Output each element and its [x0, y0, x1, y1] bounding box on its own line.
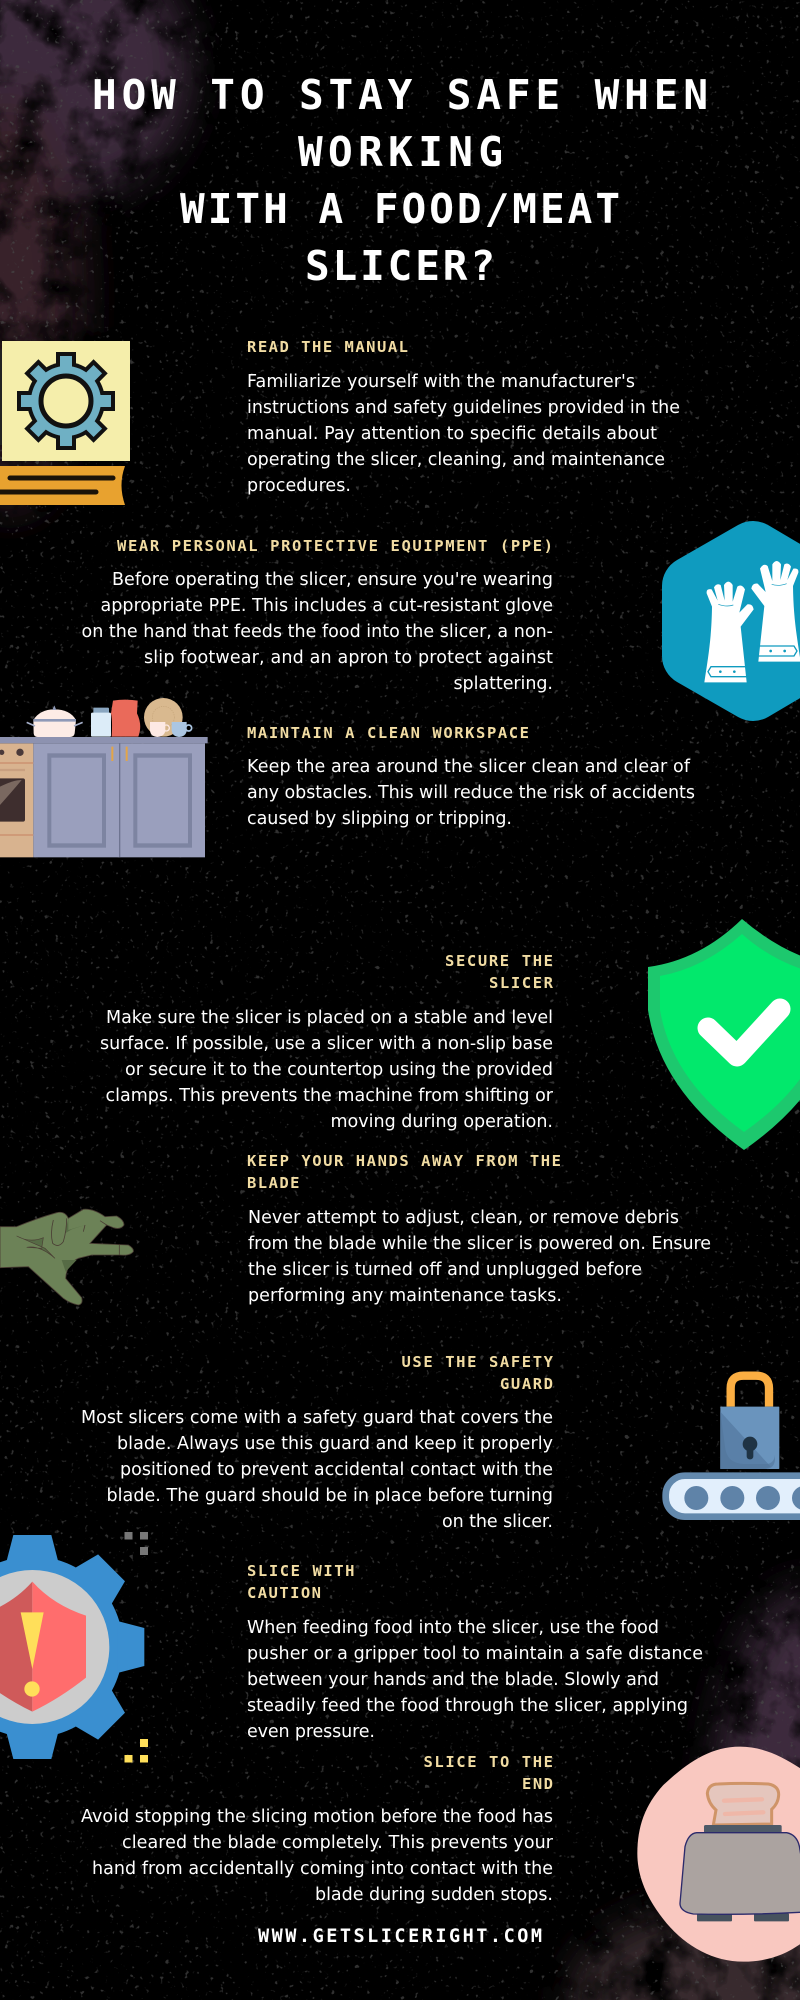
text: clean workspace body	[247, 757, 695, 829]
text: safety guard body: blade. Always use this guard and keep it properly	[117, 1434, 553, 1454]
text: PPE body: Before operating the slicer, ensure you're wearing	[112, 570, 553, 590]
text: secure the slicer body: surface. If possible, use a slicer with a non-slip base	[100, 1034, 553, 1054]
text: slice with caution body: even pressure.	[247, 1722, 375, 1742]
text: slice with caution body	[247, 1618, 703, 1742]
decorative squares: grey	[124, 1532, 148, 1555]
heading: slice with caution	[247, 1562, 354, 1602]
glove left	[704, 582, 754, 682]
heading: slice with caution: SLICE WITH	[247, 1562, 354, 1580]
text: secure the slicer body	[100, 1008, 554, 1132]
icon: gloves in hexagon	[692, 551, 800, 691]
section: keep your hands away	[247, 1152, 711, 1306]
text: slice to the end body: Avoid stopping the slicing motion before the food has	[81, 1807, 553, 1827]
icon: green hand	[0, 1209, 133, 1305]
text: clean workspace body: Keep the area around the slicer clean and clear of	[247, 757, 691, 777]
text: slice with caution body: between your hands and the blade. Slowly and	[247, 1670, 659, 1690]
text: clean workspace body: caused by slipping or tripping.	[247, 809, 512, 829]
heading: secure the slicer	[445, 952, 554, 992]
heading: keep your hands away	[247, 1152, 561, 1192]
text: safety guard body: on the slicer.	[442, 1512, 553, 1532]
title: SLICER?	[305, 242, 495, 290]
heading: keep your hands away: BLADE	[247, 1174, 300, 1192]
heading: secure the slicer: SLICER	[489, 974, 554, 992]
heading: wear PPE: WEAR PERSONAL PROTECTIVE EQUIPMENT (PPE)	[117, 537, 553, 555]
section: slice with caution	[247, 1562, 703, 1742]
text: safety guard body: Most slicers come with a safety guard that covers the	[81, 1408, 553, 1428]
heading: clean workspace: MAINTAIN A CLEAN WORKSPACE	[247, 724, 529, 742]
text: read the manual body: instructions and safety guidelines provided in the	[247, 398, 680, 418]
text: PPE body: appropriate PPE. This includes a cut-resistant glove	[100, 596, 553, 616]
text: safety guard body	[81, 1408, 553, 1532]
text: keep your hands away body: Never attempt to adjust, clean, or remove debris	[248, 1208, 679, 1228]
text: PPE body: slip footwear, and an apron to protect against	[144, 648, 553, 668]
text: slice with caution body: When feeding food into the slicer, use the food	[247, 1618, 659, 1638]
text: read the manual body	[247, 372, 680, 496]
section: secure the slicer	[100, 952, 554, 1132]
decorative squares: yellow	[124, 1739, 148, 1762]
text: slice to the end body	[81, 1807, 554, 1905]
heading: safety guard	[402, 1353, 554, 1393]
section: personal protective equipment	[82, 537, 553, 694]
heading: safety guard: USE THE SAFETY	[402, 1353, 554, 1371]
text: slice to the end body: cleared the blade completely. This prevents your	[122, 1833, 554, 1853]
text: read the manual body: operating the slicer, cleaning, and maintenance	[247, 450, 665, 470]
text: read the manual body: Familiarize yourself with the manufacturer's	[247, 372, 635, 392]
title	[92, 71, 708, 290]
heading: safety guard: GUARD	[500, 1375, 553, 1393]
icon: green shield with check	[648, 919, 800, 1150]
title: WORKING	[298, 128, 503, 176]
footer url: WWW.GETSLICERIGHT.COM	[258, 1926, 542, 1947]
text: secure the slicer body: or secure it to the countertop using the provided	[125, 1060, 553, 1080]
title: WITH A FOOD/MEAT	[180, 185, 620, 233]
icon: padlock on conveyor	[666, 1376, 800, 1517]
text: PPE body: splattering.	[454, 674, 553, 694]
text: slice with caution body: steadily feed the food through the slicer, applying	[247, 1696, 688, 1716]
text: secure the slicer body: moving during operation.	[330, 1112, 553, 1132]
text: clean workspace body: any obstacles. This will reduce the risk of accidents	[247, 783, 695, 803]
icon: toaster on pink blob	[637, 1747, 800, 1962]
heading: keep your hands away: KEEP YOUR HANDS AWAY FROM THE	[247, 1152, 561, 1170]
glove right	[751, 561, 800, 662]
text: PPE body	[82, 570, 553, 694]
heading: slice to the end: END	[522, 1775, 553, 1793]
section: use the safety guard	[81, 1353, 554, 1532]
text: read the manual body: manual. Pay attention to specific details about	[247, 424, 657, 444]
text: slice with caution body: pusher or a gripper tool to maintain a safe distance	[247, 1644, 703, 1664]
text: safety guard body: blade. The guard should be in place before turning	[106, 1486, 553, 1506]
icon: kitchen counter	[0, 698, 208, 857]
icon: gear with warning shield	[0, 1535, 144, 1759]
text: secure the slicer body: Make sure the slicer is placed on a stable and level	[106, 1008, 553, 1028]
heading: secure the slicer: SECURE THE	[445, 952, 553, 970]
text: PPE body: on the hand that feeds the food into the slicer, a non-	[82, 622, 553, 642]
text: safety guard body: positioned to prevent accidental contact with the	[120, 1460, 553, 1480]
text: keep your hands away body: from the blade while the slicer is powered on. Ensure	[248, 1234, 711, 1254]
text: keep your hands away body	[248, 1208, 711, 1306]
text: keep your hands away body: the slicer is turned off and unplugged before	[248, 1260, 642, 1280]
section: maintain a clean workspace	[247, 724, 695, 829]
text: slice to the end body: blade during sudden stops.	[315, 1885, 553, 1905]
text: slice to the end body: hand from accidentally coming into contact with the	[92, 1859, 553, 1879]
section: read the manual	[247, 338, 680, 496]
text: secure the slicer body: clamps. This prevents the machine from shifting or	[106, 1086, 554, 1106]
heading: slice to the end: SLICE TO THE	[424, 1753, 553, 1771]
heading: read the manual: READ THE MANUAL	[247, 338, 408, 356]
heading: slice with caution: CAUTION	[247, 1584, 321, 1602]
title: HOW TO STAY SAFE WHEN	[92, 71, 708, 119]
text: read the manual body: procedures.	[247, 476, 351, 496]
icon: manual book with gear	[0, 341, 130, 505]
heading: slice to the end	[424, 1753, 553, 1793]
text: keep your hands away body: performing any maintenance tasks.	[248, 1286, 562, 1306]
section: slice to the end	[81, 1753, 554, 1905]
